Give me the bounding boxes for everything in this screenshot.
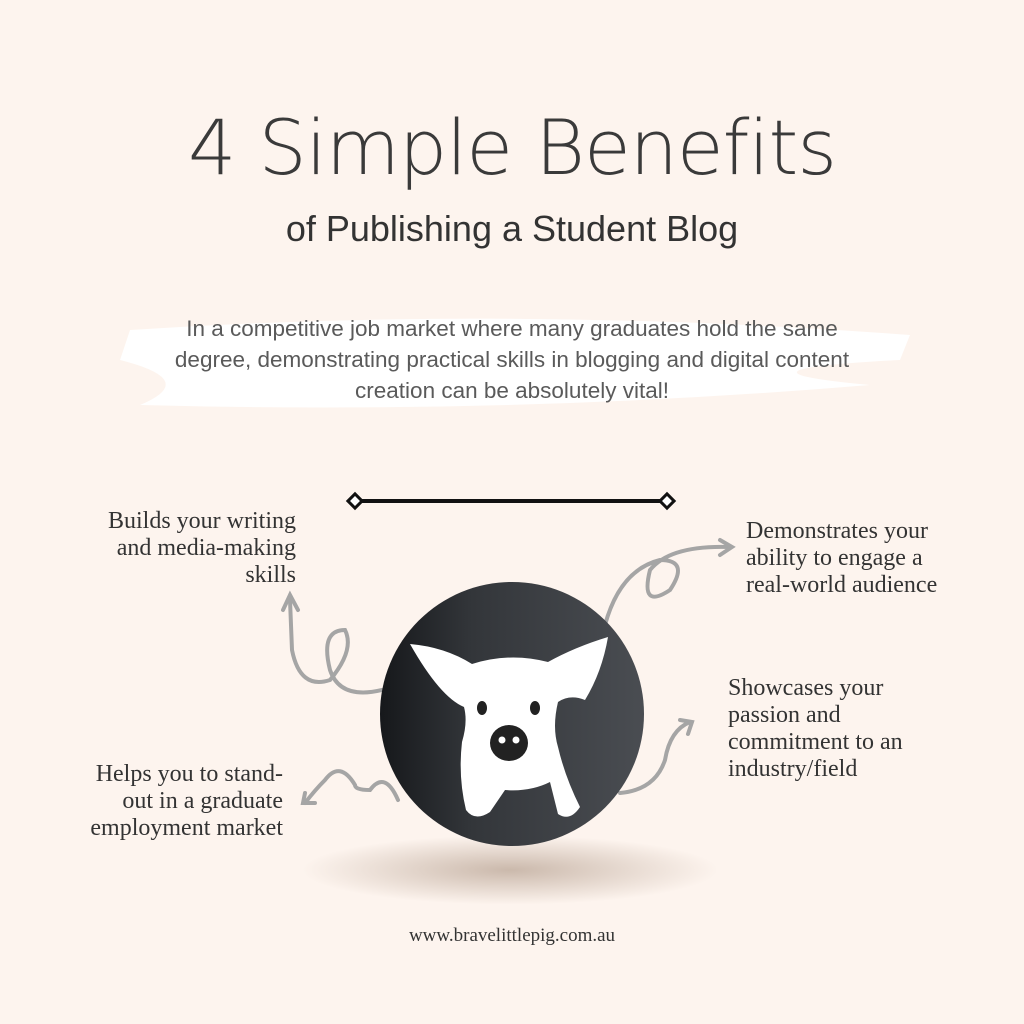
icon: pig	[410, 637, 608, 817]
text: writing skills: Builds your writing and media-making skills	[108, 508, 296, 588]
text: stand-out: employment market	[90, 815, 283, 841]
text: stand-out	[90, 761, 283, 841]
text: stand-out: Helps you to stand-	[96, 761, 283, 787]
website url: www.bravelittlepig.com.au	[409, 925, 615, 946]
intro text: In a competitive job market where many graduates hold the same degree, demonstrating practical skills in blogging and digital content creation can be absolutely vital!	[175, 316, 849, 403]
brush stroke	[120, 318, 910, 408]
text: stand-out: out in a graduate	[122, 788, 283, 814]
subtitle: of Publishing a Student Blog	[286, 208, 738, 249]
divider line with diamonds	[346, 492, 676, 510]
circle with pig	[380, 582, 644, 846]
title: 4 Simple Benefits	[188, 103, 836, 192]
shadow	[300, 835, 720, 905]
text: passion: Showcases your passion and commitment to an industry/field	[728, 675, 903, 782]
text: audience: Demonstrates your ability to engage a real-world audience	[746, 518, 937, 598]
